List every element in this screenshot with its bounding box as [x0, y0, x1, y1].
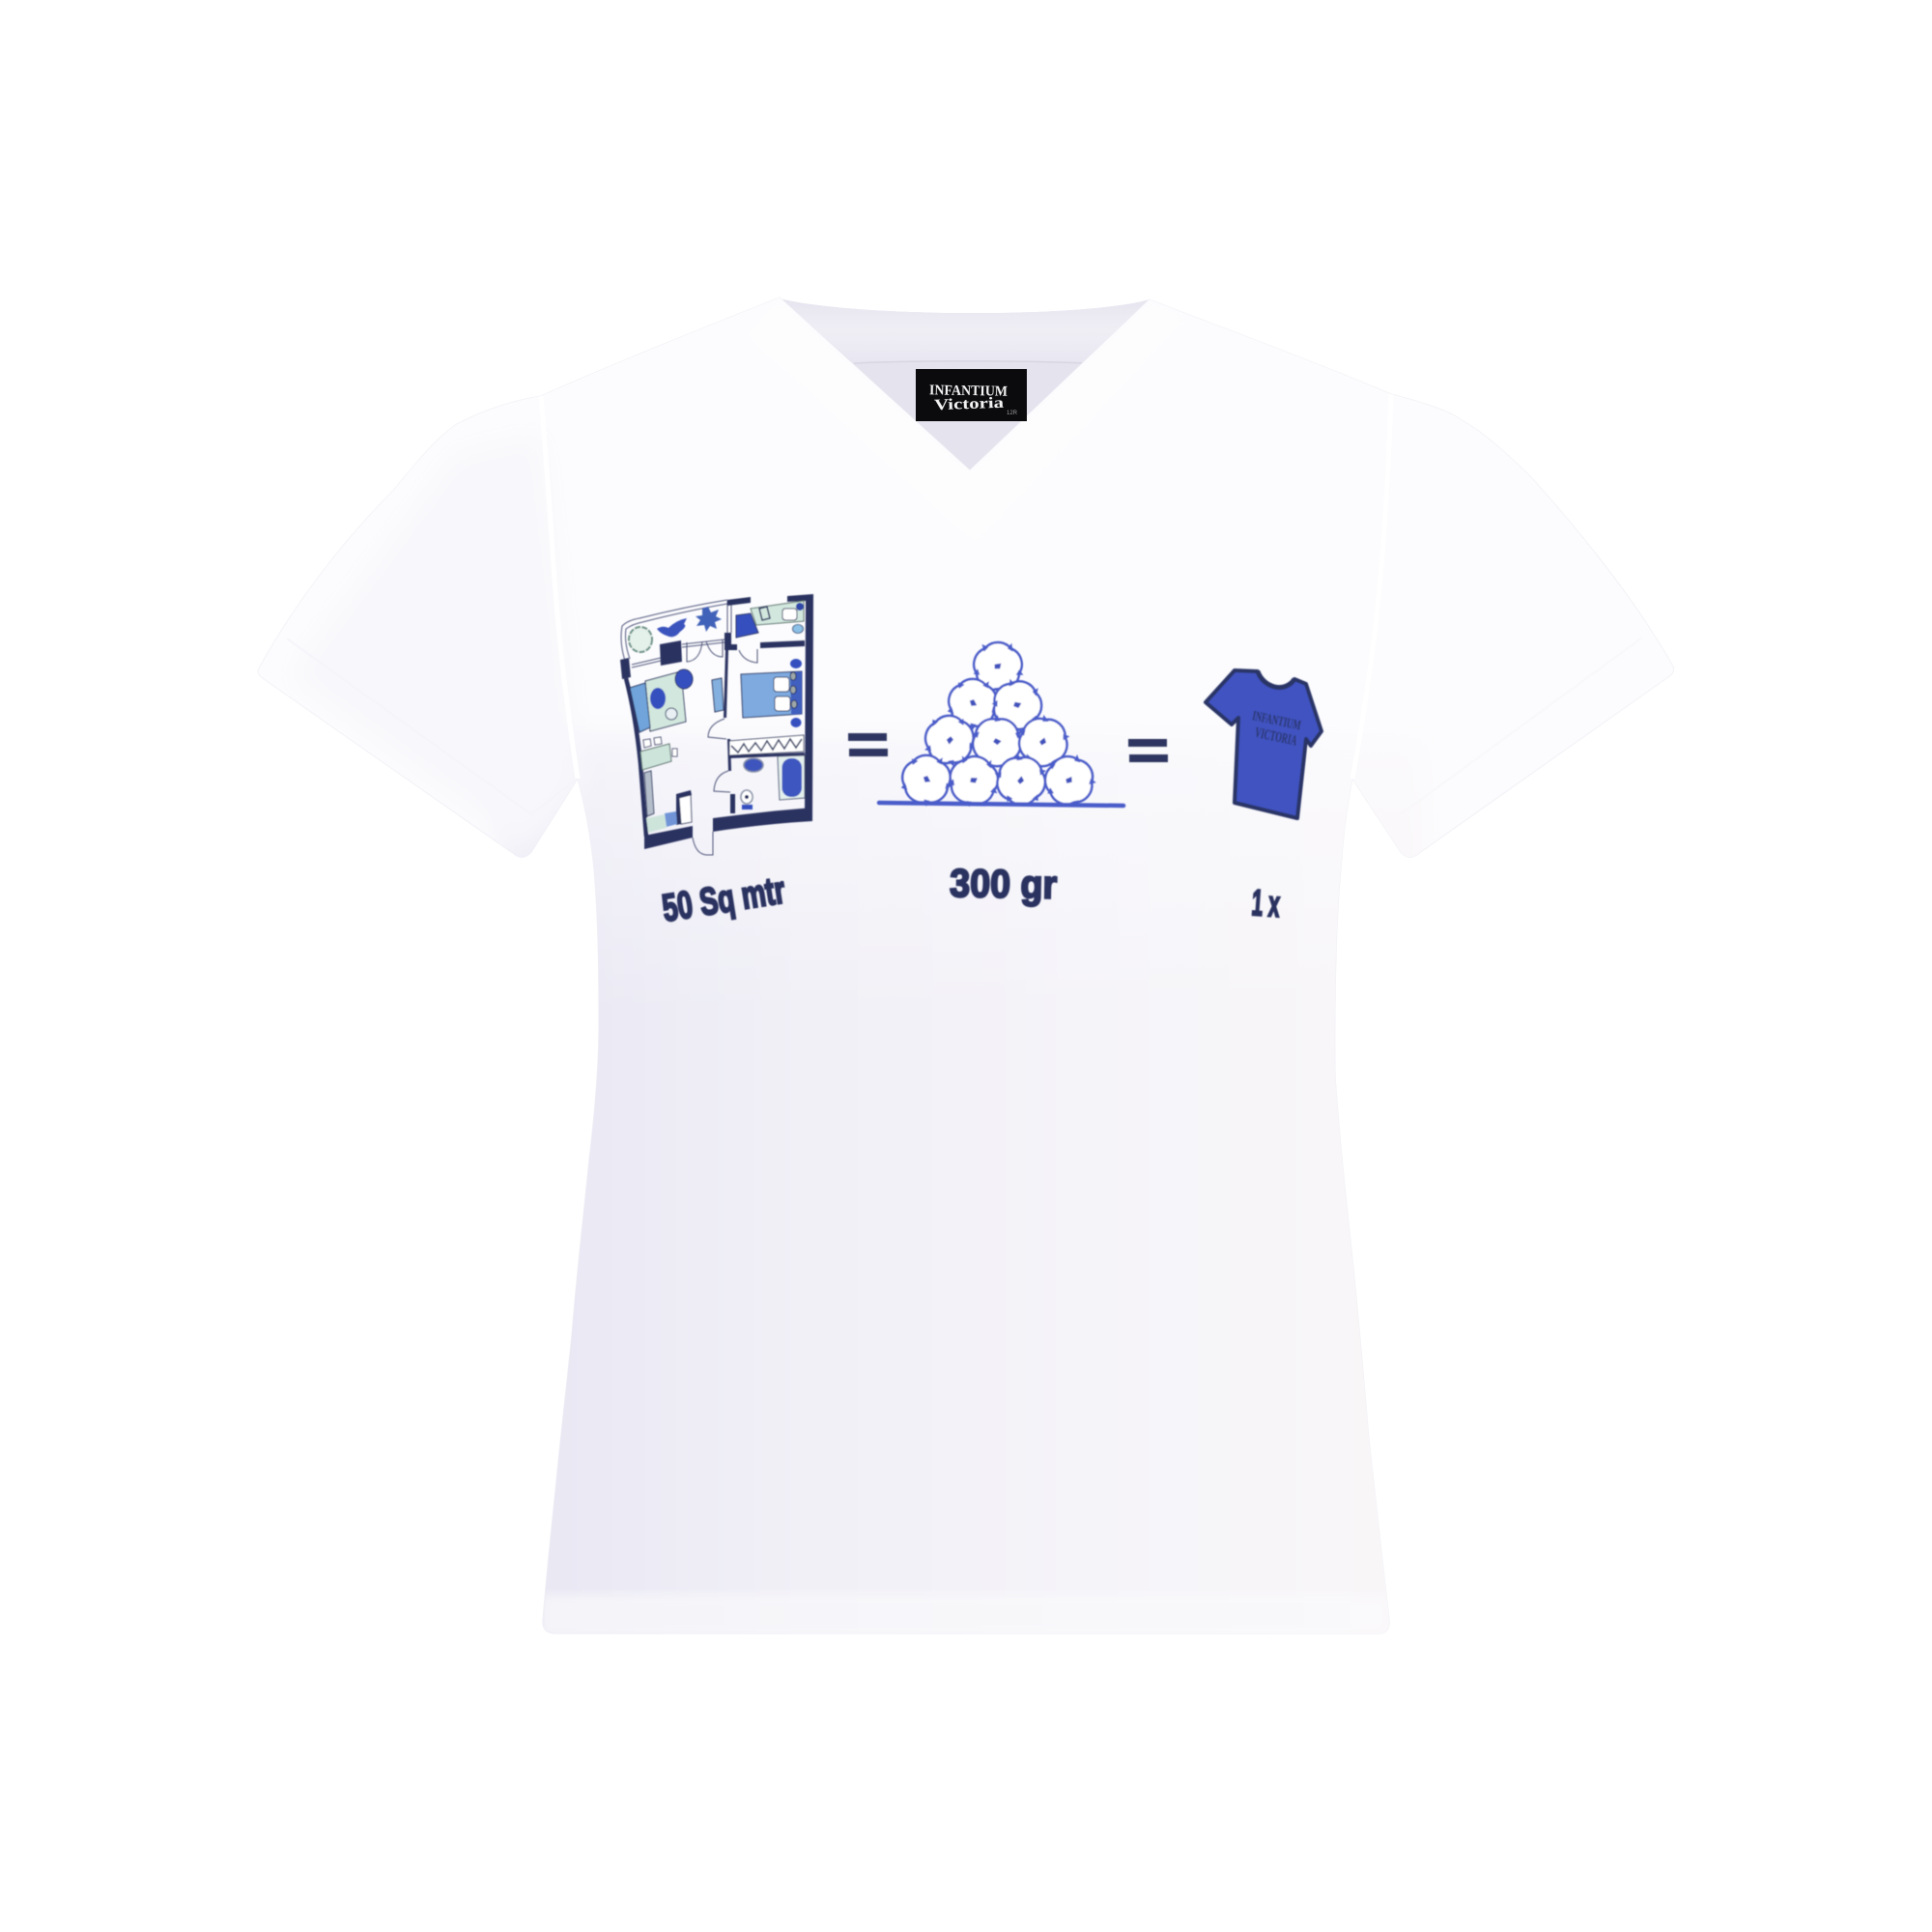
shirt shading — [232, 280, 1700, 1662]
armchair — [675, 669, 693, 689]
t-shirt infographic — [257, 298, 1674, 1634]
balcony star plant — [696, 607, 722, 632]
right sleeve cuff — [1401, 638, 1642, 814]
neck opening inner back — [780, 298, 1150, 470]
cotton ball 5 — [961, 708, 1032, 779]
bathroom sink — [744, 758, 763, 772]
v-neck ribbing band — [742, 298, 1190, 547]
door arcs — [687, 639, 757, 855]
toilet — [741, 790, 753, 810]
walls — [620, 594, 813, 849]
cotton ball 9 — [987, 746, 1058, 816]
equals sign one — [848, 733, 888, 756]
label: 50 Sq mtr: 50 Sq mtr — [660, 868, 788, 930]
label size: 12R — [1007, 411, 1018, 416]
left wall curve — [626, 678, 646, 837]
hem band — [544, 1597, 719, 1634]
torso tone — [510, 757, 1385, 1633]
small shirt logo line one: INFANTIUM — [1251, 709, 1302, 733]
cotton ball 4 — [913, 704, 983, 775]
small shirt logo line two: VICTORIA — [1254, 725, 1298, 750]
hallway cabinet — [712, 678, 724, 712]
living room rug — [645, 671, 686, 731]
label brand name line two: Victoria — [934, 395, 1004, 413]
closet rail with hangers — [729, 735, 804, 755]
t-shirt garment — [232, 280, 1700, 1662]
side table — [666, 708, 677, 720]
nightstands — [790, 659, 802, 668]
left sleeve tone — [290, 435, 580, 850]
study blue rug — [736, 613, 758, 638]
cotton ball 3 — [985, 674, 1049, 739]
small shirt collar — [1258, 671, 1294, 688]
printed equation artwork — [620, 594, 1321, 930]
cotton ball 8 — [945, 753, 1003, 811]
brand neck label — [916, 369, 1027, 421]
cotton ball 1 — [974, 642, 1023, 694]
study pillow — [782, 609, 797, 620]
dining chairs — [643, 737, 677, 756]
cotton ball 10 — [1039, 751, 1100, 812]
bed side lamps — [790, 672, 797, 708]
balcony plant — [629, 627, 652, 652]
right sleeve seam — [1352, 394, 1391, 779]
icon: apartment floor plan — [620, 594, 813, 855]
study desk — [751, 601, 804, 625]
cotton ball 2 — [940, 672, 1004, 736]
label: 300 gr: 300 gr — [950, 861, 1058, 907]
shirt body and sleeves — [258, 298, 1674, 1634]
living room table — [650, 688, 666, 709]
chest highlight fade — [259, 298, 1673, 817]
balcony outline — [621, 600, 731, 668]
bed headboard band — [790, 671, 802, 715]
study stool — [792, 624, 804, 634]
label brand name line one: INFANTIUM — [929, 383, 1008, 400]
study lamp — [796, 603, 804, 611]
icon: small blue t-shirt — [1206, 670, 1321, 818]
kitchen stove — [665, 811, 677, 827]
kitchen closet — [679, 795, 692, 824]
study chair — [759, 607, 770, 620]
balcony blue vase — [657, 618, 687, 637]
ground line — [879, 803, 1123, 806]
icon: cotton ball pyramid — [879, 642, 1123, 816]
cotton ball 6 — [1010, 708, 1079, 777]
kitchen counter — [646, 814, 667, 833]
cotton ball 7 — [894, 749, 957, 812]
bathtub frame — [778, 755, 805, 800]
nightstand lower — [790, 718, 802, 727]
left sleeve seam — [571, 743, 580, 779]
bed pillows — [774, 677, 789, 692]
living room sofa — [630, 683, 650, 732]
dining table — [640, 744, 671, 770]
label: 1x: 1 x — [1250, 883, 1281, 925]
equals sign two — [1128, 739, 1168, 762]
bed — [741, 671, 802, 718]
bathtub — [782, 758, 802, 797]
left sleeve cuff — [287, 639, 578, 814]
kitchen cabinets — [644, 771, 654, 816]
